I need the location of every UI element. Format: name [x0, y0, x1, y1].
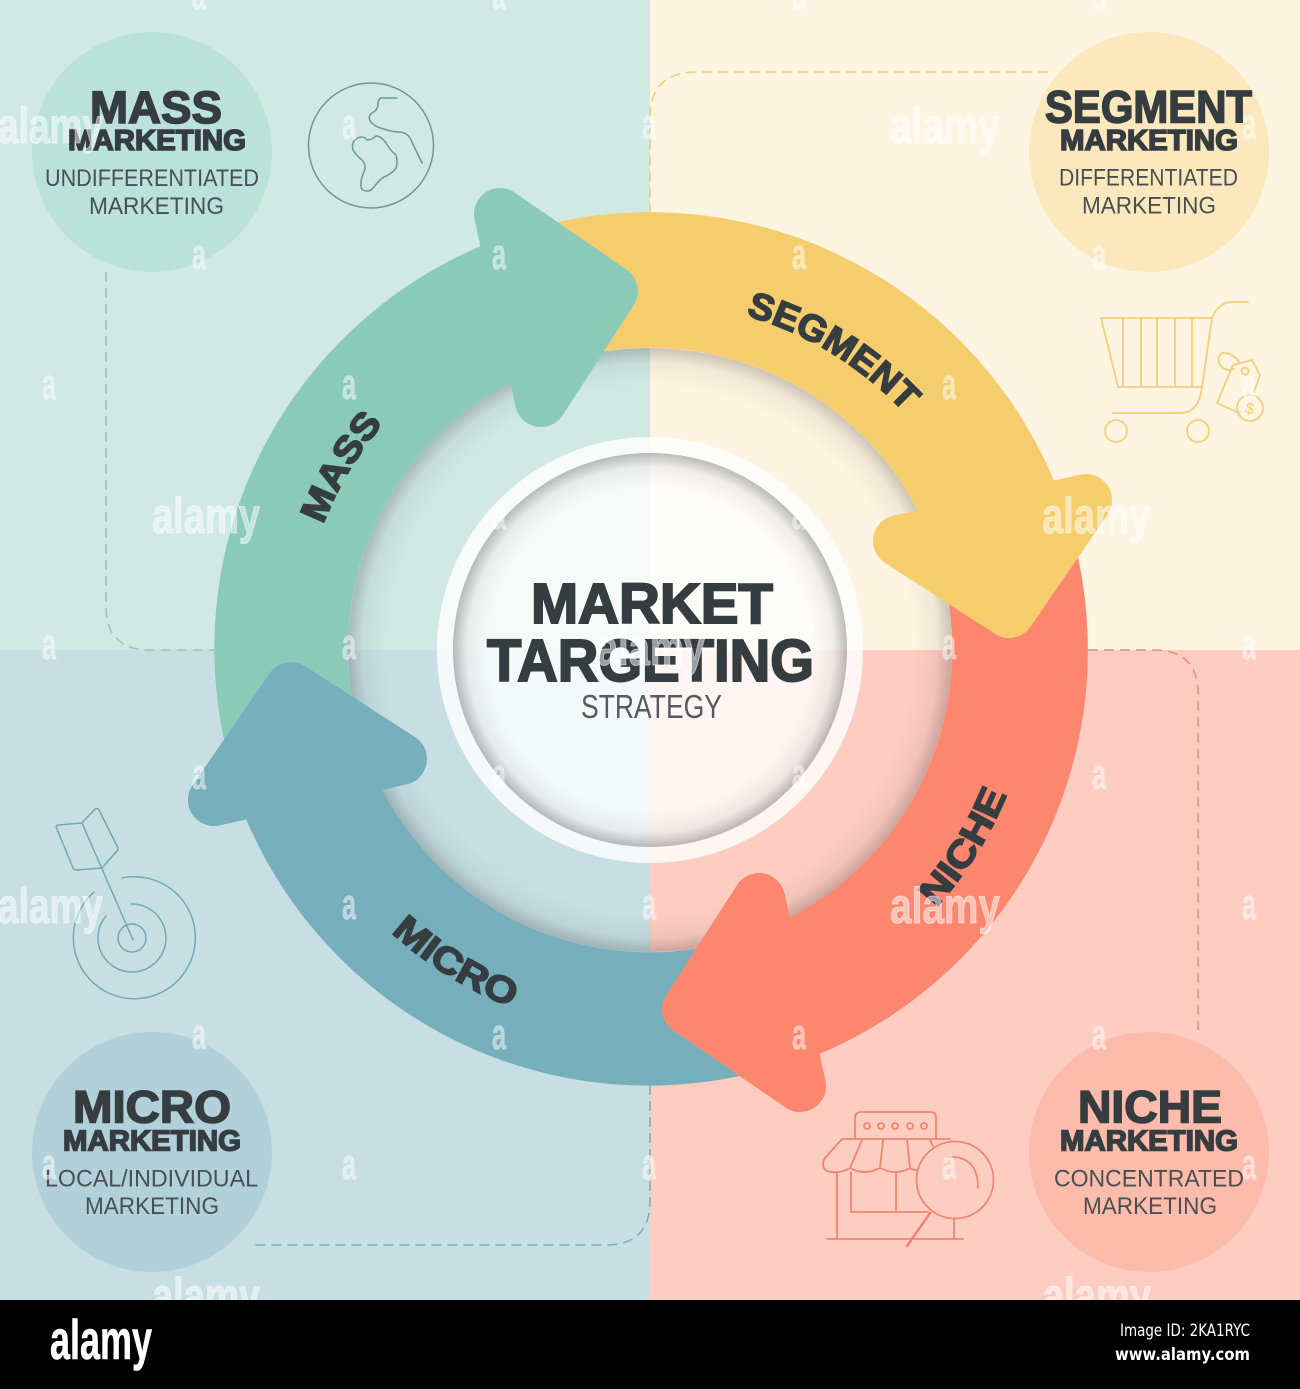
icon: shopping cart with price tag: $ [1243, 400, 1256, 419]
footer bar: www.alamy.com [1115, 1345, 1250, 1365]
watermark overlay: alamy [597, 620, 705, 676]
connector: niche dashed line [1088, 650, 1198, 1030]
watermark overlay: a [792, 230, 806, 279]
watermark overlay: a [942, 1140, 956, 1189]
panel: mass marketing callout [32, 32, 272, 272]
watermark overlay: a [642, 1140, 656, 1189]
arrow: niche [688, 558, 1088, 1086]
watermark overlay: a [1242, 1140, 1256, 1189]
title: market targeting strategy: STRATEGY [581, 688, 722, 725]
watermark overlay: alamy [152, 488, 260, 544]
watermark overlay: a [1242, 620, 1256, 669]
arrow: micro [214, 688, 740, 1086]
watermark overlay: a [1242, 880, 1256, 929]
title: market targeting strategy [487, 572, 814, 725]
inner ring shading [348, 348, 952, 952]
watermark overlay: a [492, 750, 506, 799]
panel: segment marketing callout: DIFFERENTIATED [1059, 164, 1238, 192]
footer bar: Image ID: 2KA1RYC [1120, 1321, 1250, 1341]
panel: segment marketing callout: SEGMENT [1045, 82, 1252, 132]
watermark overlay: a [342, 360, 356, 409]
watermark overlay: a [342, 1140, 356, 1189]
watermark overlay: alamy [0, 98, 103, 154]
arrow label: mass: MASS [300, 412, 380, 524]
watermark overlay: a [42, 620, 56, 669]
panel: segment quadrant background [650, 0, 1300, 650]
watermark overlay: a [1092, 230, 1106, 279]
title: market targeting strategy: MARKET [531, 572, 773, 636]
footer bar [0, 1300, 1300, 1389]
watermark overlay: a [492, 1010, 506, 1059]
watermark overlay: alamy [1042, 488, 1150, 544]
arrow label: micro: MICRO [392, 914, 517, 1004]
panel: niche marketing callout: CONCENTRATED [1054, 1166, 1244, 1192]
panel: niche marketing callout: MARKETING [1083, 1193, 1217, 1220]
watermark overlay: alamy [890, 878, 1000, 934]
icon: shopping cart with price tag [1101, 302, 1263, 442]
watermark overlay: a [1092, 750, 1106, 799]
connector: micro dashed line [253, 1085, 650, 1245]
watermark overlay: a [1242, 100, 1256, 149]
watermark overlay: a [942, 360, 956, 409]
icon: store with magnifier [823, 1112, 994, 1246]
panel: niche quadrant background [650, 650, 1300, 1300]
watermark overlay: a [642, 880, 656, 929]
panel: niche marketing callout: MARKETING [1060, 1126, 1238, 1158]
watermark overlay: a [342, 620, 356, 669]
panel: mass marketing callout: MARKETING [89, 193, 224, 220]
watermark overlay: a [942, 620, 956, 669]
arrow label: segment: SEGMENT [748, 292, 924, 408]
watermark overlay: a [342, 880, 356, 929]
panel: micro quadrant background [0, 650, 650, 1300]
watermark overlay: a [792, 750, 806, 799]
watermark overlay: a [792, 1010, 806, 1059]
watermark overlay: a [192, 750, 206, 799]
watermark overlay: a [192, 230, 206, 279]
panel: niche marketing callout: NICHE [1078, 1082, 1222, 1132]
panel: segment marketing callout [1029, 32, 1269, 272]
connector: segment dashed line [650, 72, 1048, 212]
watermark overlay: a [192, 1010, 206, 1059]
watermark overlay: a [642, 100, 656, 149]
panel: segment marketing callout: MARKETING [1060, 125, 1238, 157]
watermark overlay: alamy [890, 98, 1000, 154]
watermark overlay: a [342, 100, 356, 149]
panel: mass marketing callout: UNDIFFERENTIATED [45, 165, 259, 192]
panel: micro marketing callout: MICRO [73, 1082, 231, 1132]
arrow label: niche: NICHE [917, 785, 1008, 907]
panel: micro marketing callout: LOCAL/INDIVIDUAL [45, 1166, 258, 1192]
arrow: mass [214, 214, 612, 740]
panel: micro marketing callout [32, 1032, 272, 1272]
watermark overlay: a [492, 490, 506, 539]
panel: mass quadrant background [0, 0, 650, 650]
panel: micro marketing callout: MARKETING [63, 1126, 241, 1158]
panel: segment marketing callout: MARKETING [1082, 192, 1216, 220]
watermark overlay: a [42, 360, 56, 409]
panel: mass marketing callout: MASS [90, 82, 222, 133]
watermark overlay: a [1092, 1010, 1106, 1059]
footer bar: alamy [50, 1308, 152, 1371]
watermark overlay: a [792, 490, 806, 539]
watermark overlay: alamy [1043, 1268, 1151, 1324]
watermark overlay: a [1242, 360, 1256, 409]
panel: niche marketing callout [1029, 1032, 1269, 1272]
center disc [445, 445, 855, 855]
connector: mass dashed line [106, 272, 216, 650]
panel: micro marketing callout: MARKETING [85, 1193, 219, 1220]
watermark overlay: alamy [0, 878, 103, 934]
arrow: segment [558, 212, 1086, 612]
watermark overlay: alamy [152, 1268, 260, 1324]
icon: dart and target [56, 808, 195, 999]
watermark overlay: a [492, 230, 506, 279]
title: market targeting strategy: TARGETING [487, 628, 814, 694]
icon: globe [308, 83, 434, 208]
watermark overlay: a [42, 1140, 56, 1189]
panel: mass marketing callout: MARKETING [68, 125, 246, 157]
